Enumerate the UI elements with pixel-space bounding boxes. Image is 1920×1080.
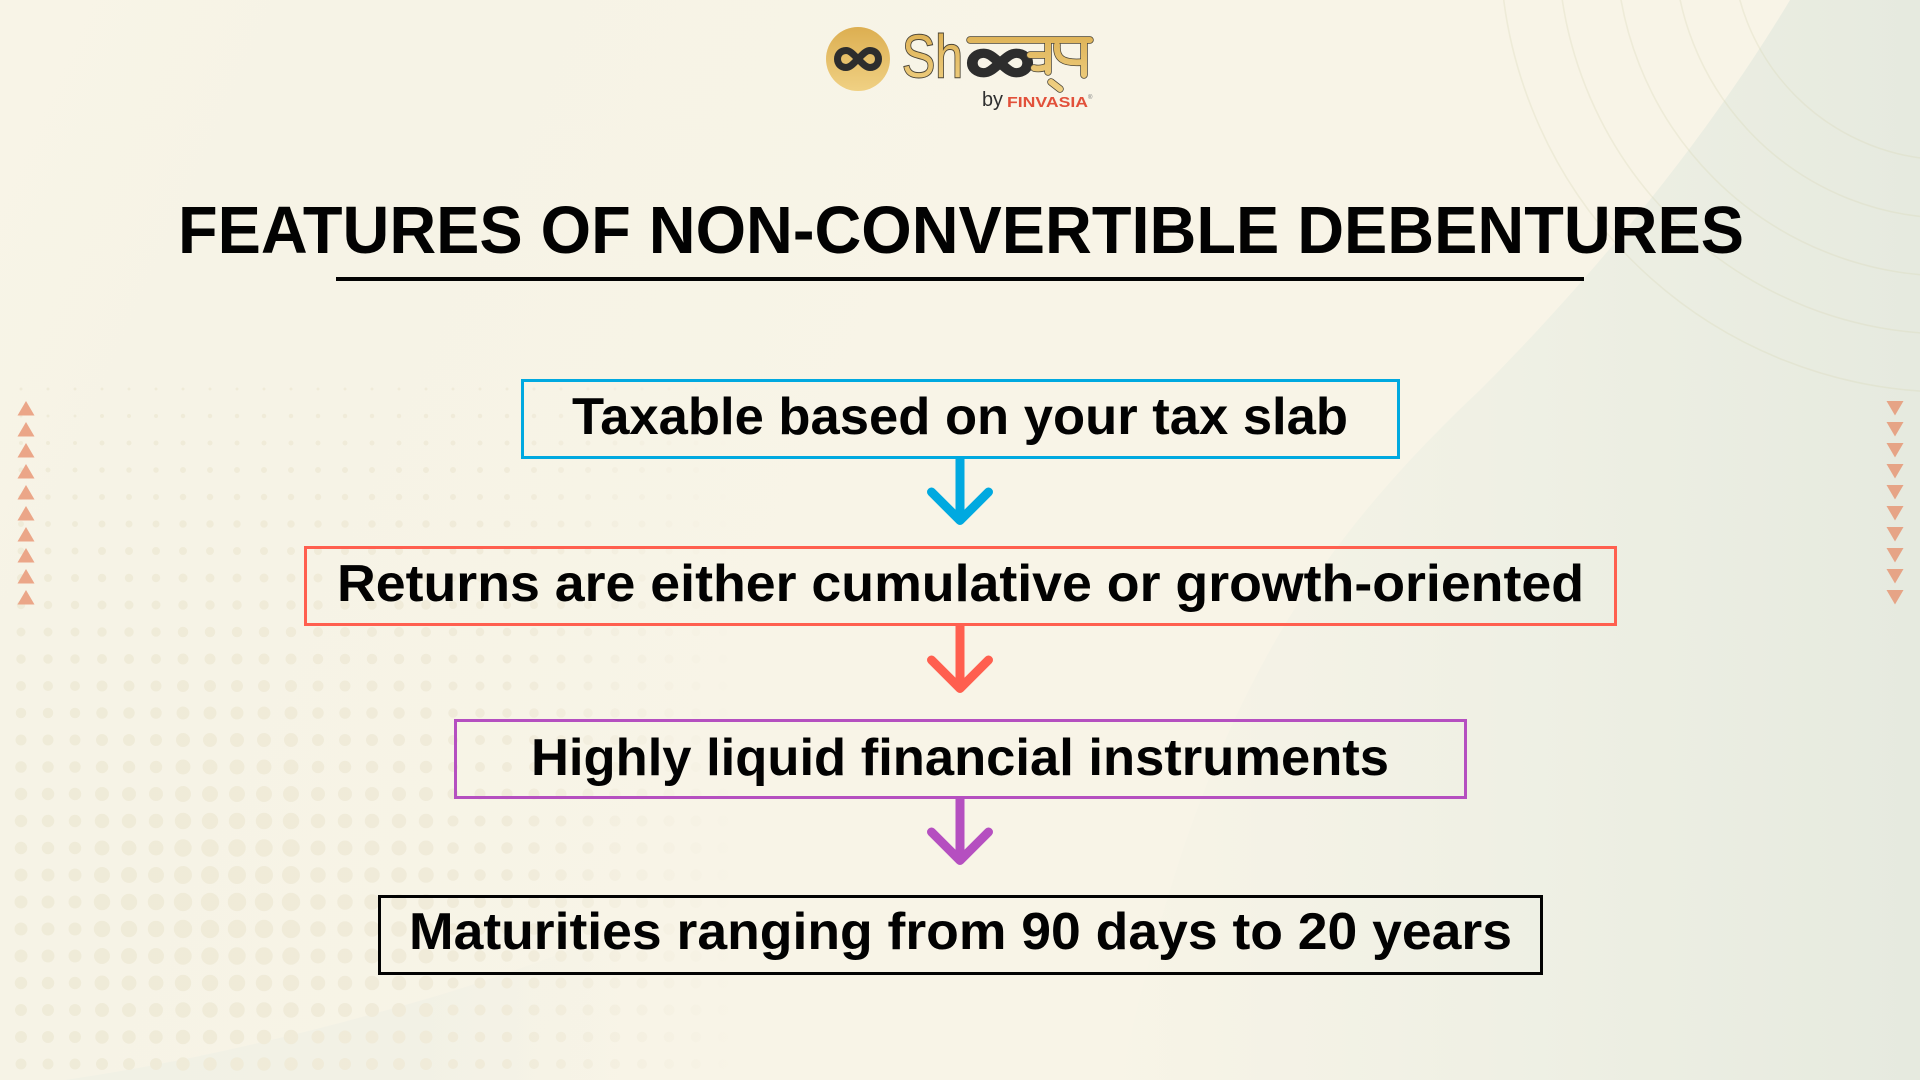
left triangles column xyxy=(18,401,34,604)
arrow: red xyxy=(932,626,988,688)
logo byline: by: by xyxy=(982,89,1003,111)
halftone dot pattern xyxy=(21,389,724,1064)
feature box: liquidity xyxy=(456,720,1466,798)
icon: gold infinity badge xyxy=(826,27,890,91)
arrow: purple xyxy=(932,798,988,860)
feature box: maturities xyxy=(380,896,1542,974)
feature text: liquidity: Highly liquid financial instruments xyxy=(531,729,1389,787)
feature box: returns xyxy=(306,548,1616,624)
logo byline: Finvasia: FINVASIA xyxy=(1007,94,1088,111)
logo wordmark: Devanagari mark xyxy=(970,40,1090,89)
arrow: blue xyxy=(932,459,988,520)
logo: Shoonya by Finvasia xyxy=(826,23,1093,111)
title: FEATURES OF NON-CONVERTIBLE DEBENTURES xyxy=(178,193,1744,268)
registered mark: ® xyxy=(1088,94,1093,101)
right triangles column xyxy=(1886,401,1904,604)
feature text: maturities: Maturities ranging from 90 days to 20 years xyxy=(409,903,1512,961)
logo wordmark: Sh: Sh xyxy=(902,23,963,90)
icon: wordmark infinity xyxy=(972,53,1028,73)
feature text: returns: Returns are either cumulative or growth-oriented xyxy=(337,555,1584,613)
feature box: tax slab xyxy=(522,380,1398,458)
feature text: tax slab: Taxable based on your tax slab xyxy=(572,388,1348,446)
